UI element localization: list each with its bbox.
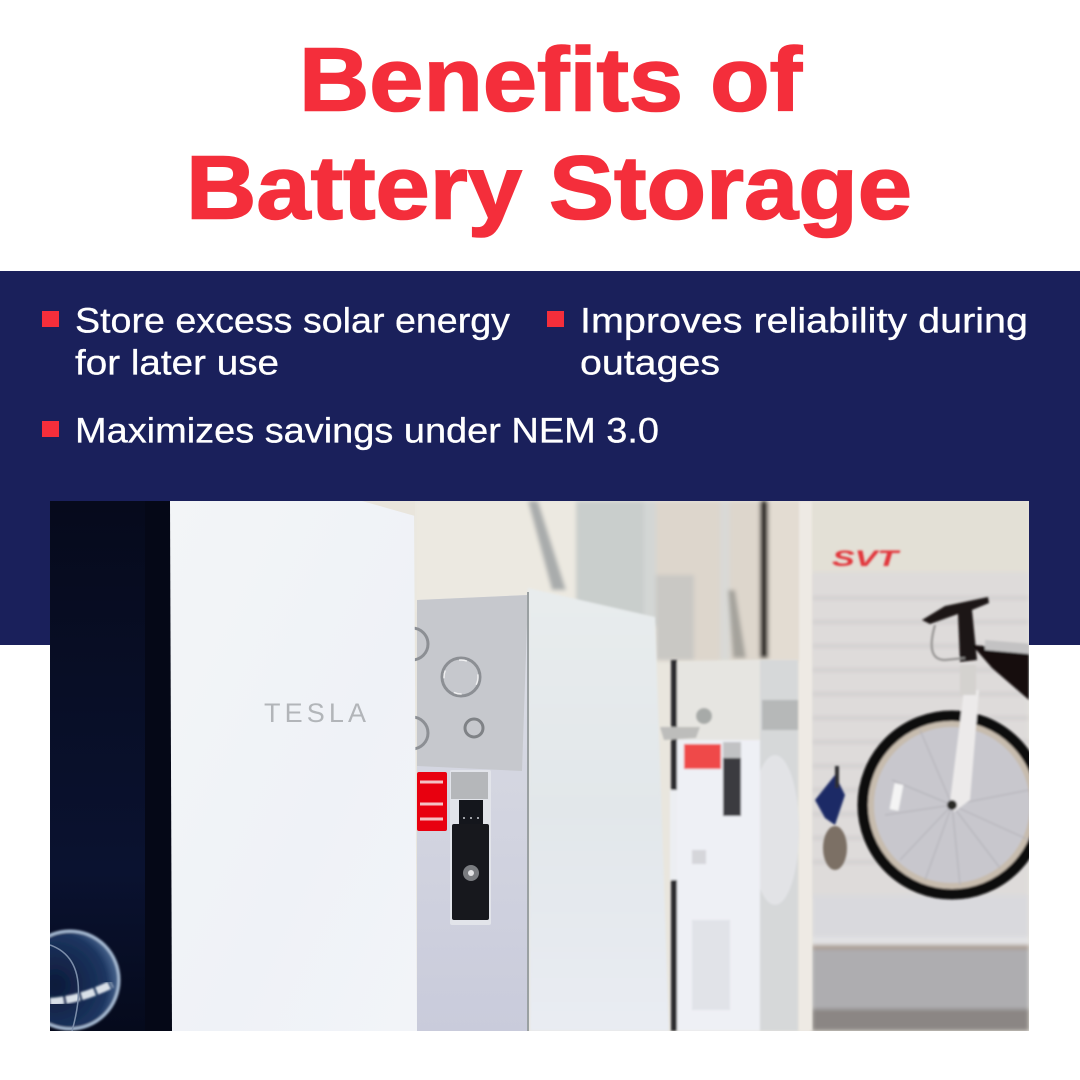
bullet: improves reliability: outages [580, 344, 720, 382]
warning sticker [417, 772, 447, 831]
disconnect switch [450, 770, 491, 925]
dark left column with glass ball [50, 501, 172, 1031]
benefits list [42, 302, 1028, 450]
bullet: store excess solar energy [42, 302, 511, 382]
fork [950, 690, 979, 812]
bicycle [863, 597, 1041, 894]
grey cabinet [414, 592, 529, 1031]
back wall and conduits [527, 501, 798, 662]
panel: navy banner [0, 271, 1080, 645]
bullet: maximizes savings: Maximizes savings under NEM 3.0 [75, 412, 659, 450]
bullet: store excess solar energy: Store excess solar energy [75, 302, 511, 340]
inverter cabinet door [528, 588, 669, 1031]
title: Battery Storage [186, 138, 912, 238]
title: Benefits of [299, 30, 803, 130]
photo: Tesla battery installation in a garage [21, 501, 1041, 1031]
hanging tools [815, 766, 847, 870]
frame and handlebars [922, 597, 989, 662]
title [186, 30, 912, 238]
wheel [863, 716, 1041, 894]
Tesla Powerwall [170, 501, 417, 1031]
pillar [799, 501, 812, 1031]
bullet: improves reliability: Improves reliability during [580, 302, 1028, 340]
bullet: improves reliability [547, 302, 1028, 382]
SVT wall logo: SVT [832, 546, 900, 571]
right wall with slat panels [811, 572, 1029, 1031]
Tesla logo: TESLA [264, 698, 366, 728]
bullet: store excess solar energy: for later use [75, 344, 279, 382]
second battery unit [660, 660, 799, 1031]
